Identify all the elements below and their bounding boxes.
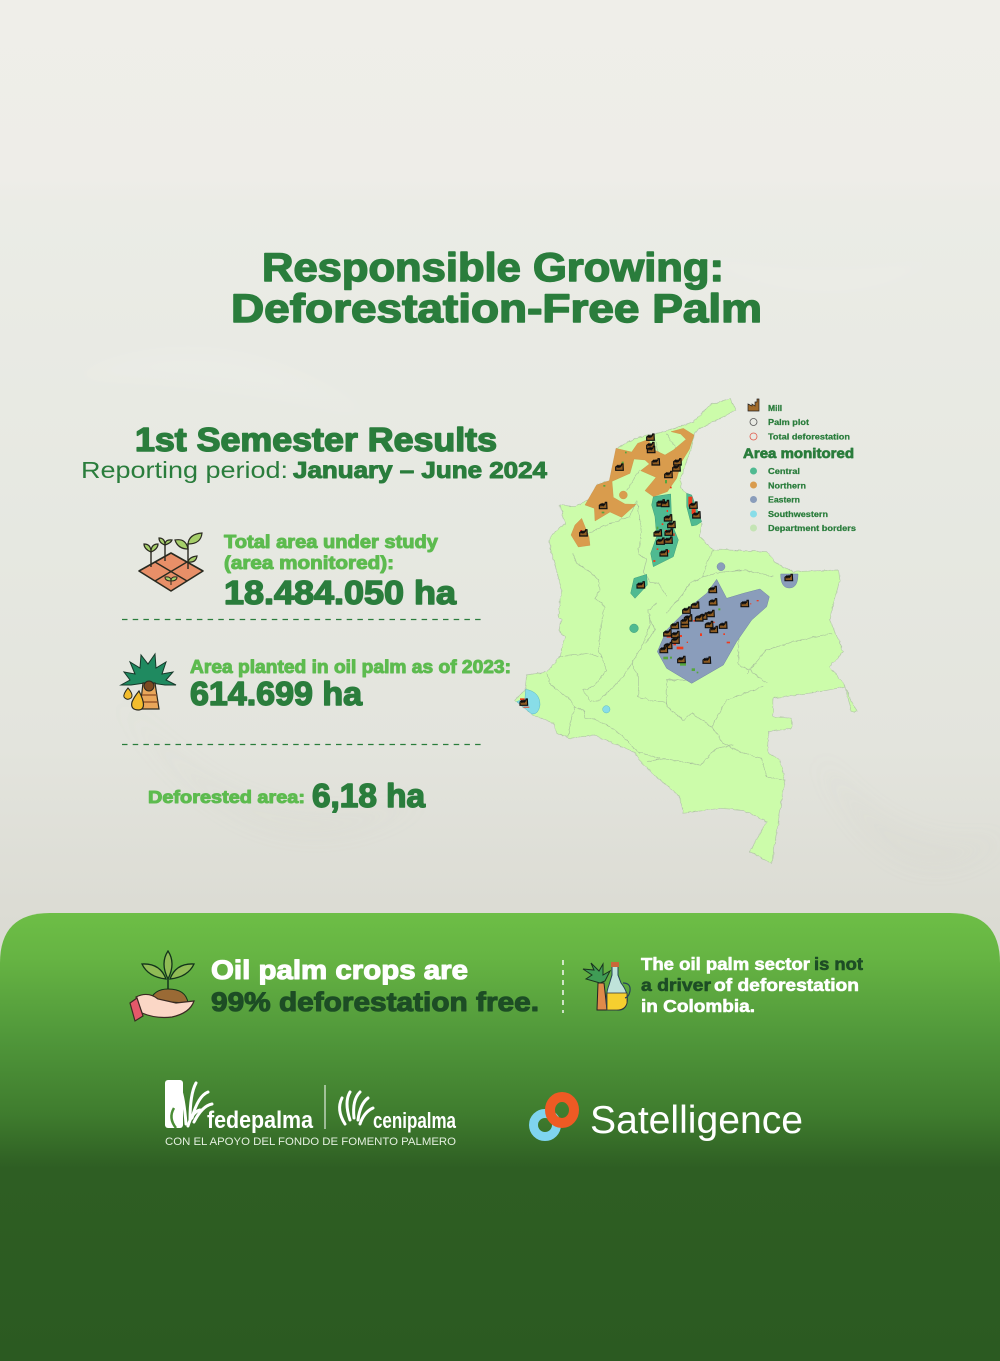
- stat: total area under study: 18.484.050 ha: [224, 574, 457, 611]
- legend: mill: Mill: [768, 403, 782, 413]
- stat: area planted in oil palm: Area planted in oil palm as of 2023:: [190, 656, 511, 677]
- map legend: [743, 399, 856, 533]
- logo: fedepalma: fedepalma: [207, 1107, 314, 1134]
- legend: northern: Northern: [768, 480, 806, 490]
- legend: southwestern: Southwestern: [768, 509, 828, 519]
- stat: total area under study: Total area under study: [224, 531, 439, 552]
- legend: palm plot: Palm plot: [768, 417, 809, 427]
- legend: central: Central: [768, 466, 800, 476]
- stat: deforested area: 6,18 ha: [312, 777, 426, 814]
- legend: total deforestation: Total deforestation: [768, 432, 850, 442]
- heading: 1st semester results: Reporting period:: [81, 457, 288, 483]
- palm plot specks: [602, 452, 720, 673]
- logo: cenipalma: [340, 1092, 457, 1133]
- stat: deforested area: [148, 777, 426, 814]
- legend heading: Area monitored: [743, 445, 854, 461]
- message: not a driver of deforestation: a driver: [641, 975, 711, 995]
- message: not a driver of deforestation: in Colombia.: [641, 996, 755, 1016]
- divider: [562, 960, 564, 1013]
- deforestation specks: [520, 487, 759, 708]
- message: not a driver of deforestation: is not: [814, 954, 863, 974]
- heading: 1st semester results: [81, 421, 547, 483]
- stat: deforested area: Deforested area:: [148, 787, 305, 807]
- stat: area planted in oil palm: [190, 656, 511, 712]
- stat: area planted in oil palm: 614.699 ha: [190, 675, 363, 712]
- eastern zone: [657, 563, 798, 683]
- map of Colombia: [515, 398, 857, 863]
- heading: 1st semester results: January – June 2024: [293, 457, 547, 483]
- divider: [122, 744, 482, 746]
- country shape with department borders: [515, 398, 857, 863]
- logo caption: CON EL APOYO DEL FONDO DE FOMENTO PALMERO: [165, 1136, 456, 1148]
- monitored zones: [517, 428, 798, 714]
- legend: eastern: Eastern: [768, 494, 800, 504]
- title: Responsible Growing:: [262, 246, 724, 290]
- message: 99% deforestation free: 99% deforestation free.: [211, 987, 539, 1017]
- message: 99% deforestation free: Oil palm crops are: [211, 955, 468, 985]
- faint palm leaf pattern: [60, 230, 1000, 867]
- message: not a driver of deforestation: of deforestation: [714, 975, 859, 995]
- logo: Satelligence: Satelligence: [590, 1099, 803, 1142]
- message: not a driver of deforestation: [641, 954, 863, 1016]
- message: 99% deforestation free: [211, 955, 539, 1017]
- logo divider: [324, 1085, 326, 1129]
- icon: oil palm tree: [121, 654, 176, 710]
- heading: 1st semester results: 1st Semester Results: [135, 421, 497, 458]
- stat: total area under study: (area monitored):: [224, 552, 394, 573]
- icon: seedlings on plot: [139, 533, 203, 591]
- divider: [122, 618, 482, 620]
- mills: [520, 434, 793, 705]
- title: [231, 246, 762, 331]
- bottom green panel: [0, 913, 1000, 1361]
- stat: total area under study: [224, 531, 457, 611]
- icon: hand holding seedling: [130, 951, 194, 1021]
- title: Deforestation-Free Palm: [231, 287, 762, 331]
- legend: department borders: Department borders: [768, 523, 856, 533]
- message: not a driver of deforestation: The oil palm sector: [641, 954, 810, 974]
- northern zone: [571, 428, 694, 547]
- logo: cenipalma: cenipalma: [373, 1108, 457, 1133]
- central zone: [630, 493, 702, 633]
- icon: oil bottle and palm: [583, 962, 630, 1010]
- logo: fedepalma: [165, 1080, 314, 1134]
- southwestern zone: [517, 689, 610, 714]
